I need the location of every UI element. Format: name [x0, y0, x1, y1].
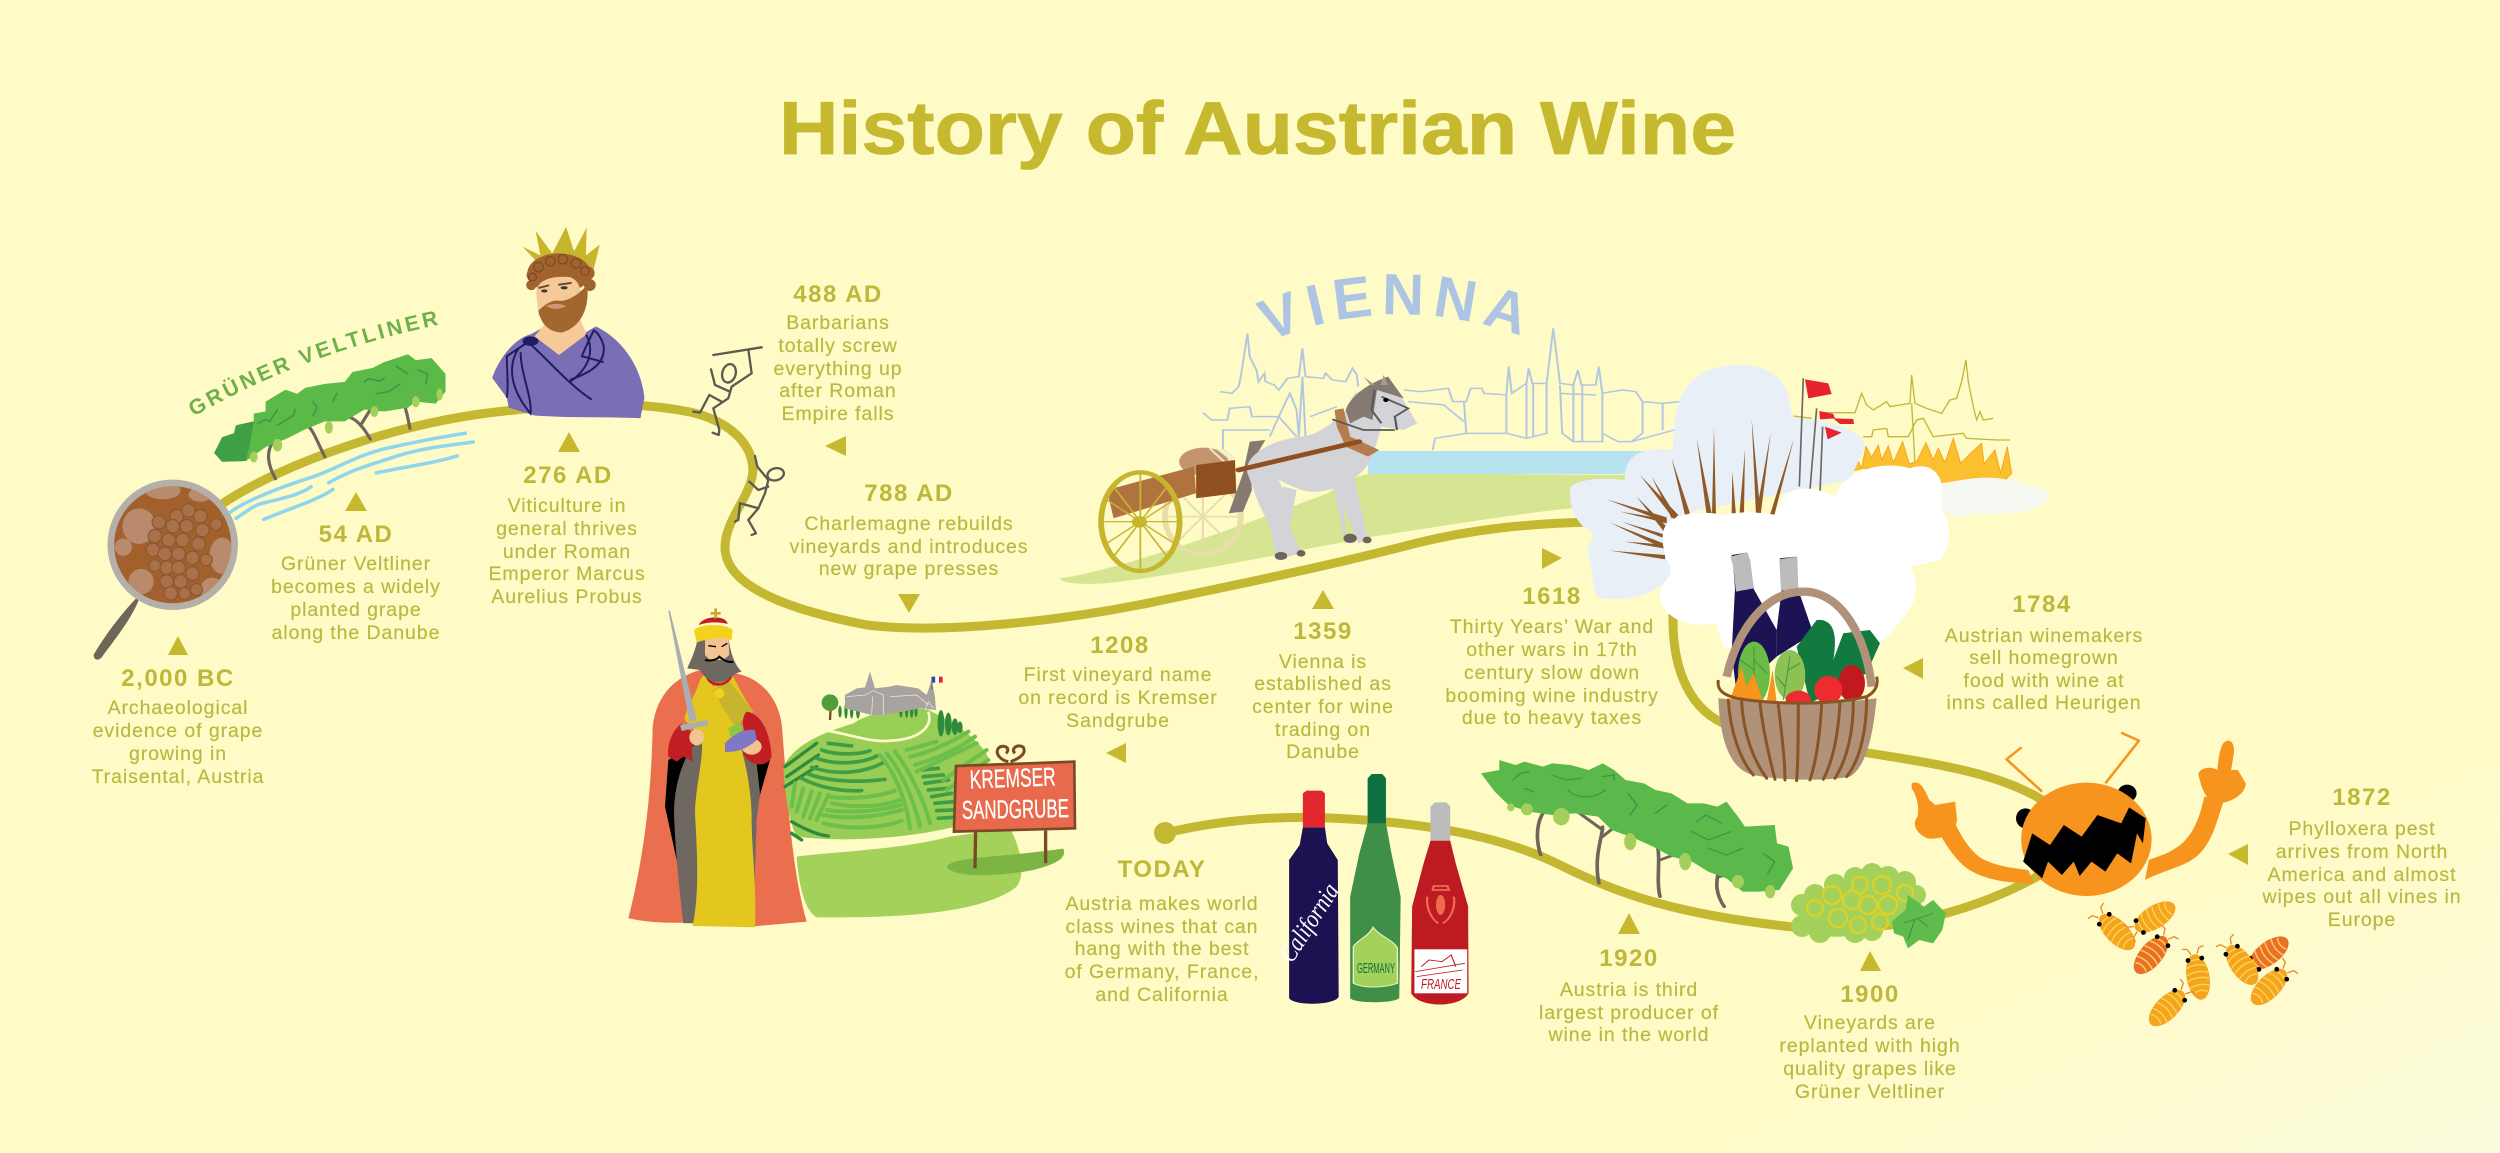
event: 1920: 1920 — [1599, 945, 1659, 972]
event: 1784: Austrian winemakers — [1945, 625, 2143, 647]
sign text: Kremser Sandgrube: KREMSER — [969, 761, 1056, 794]
event: 54 AD: becomes a widely — [271, 576, 441, 598]
event: 1900: 1900 — [1840, 981, 1900, 1008]
event: 788 AD: new grape presses — [819, 558, 999, 580]
sign text: Kremser Sandgrube: SANDGRUBE — [962, 793, 1069, 825]
event: 788 AD: 788 AD — [864, 480, 954, 507]
event: Today: class wines that can — [1066, 916, 1258, 938]
icon: grape leaf — [1892, 895, 1946, 948]
event: 1618: century slow down — [1464, 662, 1640, 684]
illustration: Danube river — [230, 433, 473, 519]
event: 788 AD: Charlemagne rebuilds — [804, 513, 1014, 535]
timeline start dot: today — [1154, 822, 1176, 844]
event: 1872: wipes out all vines in — [2261, 886, 2462, 908]
event: 1359: 1359 — [1293, 618, 1353, 645]
illustration: Charlemagne — [628, 608, 807, 927]
event: 1208: 1208 — [1090, 632, 1150, 659]
event: 1920: largest producer of — [1539, 1002, 1719, 1024]
word: VIENNA — [1255, 274, 1520, 336]
illustration: war smoke, spears, flags and burning city — [1570, 360, 2050, 658]
event: 1900: Grüner Veltliner — [1795, 1081, 1945, 1103]
event: 488 AD — [773, 281, 903, 456]
illustration: Vienna landscape and skyline — [1060, 328, 1680, 584]
event: 1872: Phylloxera pest — [2288, 818, 2436, 840]
event: 1872: arrives from North — [2276, 841, 2448, 863]
event: Today: TODAY — [1118, 856, 1206, 883]
event: 1900: quality grapes like — [1783, 1058, 1957, 1080]
illustration: Emperor Probus bust — [492, 227, 644, 418]
event: 54 AD: along the Danube — [272, 622, 440, 644]
event: 2,000 BC: 2,000 BC — [121, 665, 235, 692]
illustration: phylloxera bugs — [2088, 895, 2298, 1032]
event: 488 AD: everything up — [773, 358, 903, 380]
event: 488 AD: Barbarians — [786, 312, 890, 334]
event: 1900 — [1779, 951, 1961, 1103]
event: 1920: wine in the world — [1548, 1024, 1709, 1046]
illustration: 1920 vines — [1481, 760, 1793, 907]
title: History of Austrian Wine — [779, 86, 1736, 170]
illustration: Grüner Veltliner vines — [214, 354, 446, 479]
event: 1872: America and almost — [2268, 864, 2456, 886]
event: 276 AD: 276 AD — [523, 462, 613, 489]
event: 2,000 BC: Traisental, Austria — [92, 766, 264, 788]
event: 1618 — [1445, 548, 1659, 729]
event: 2,000 BC: Archaeological — [108, 697, 248, 719]
event: 54 AD: planted grape — [290, 599, 422, 621]
event: 788 AD: vineyards and introduces — [790, 536, 1028, 558]
illustration: horse and cart — [1101, 375, 1417, 572]
illustration: grape bunch and leaf — [1791, 861, 1946, 949]
event: 1900: replanted with high — [1779, 1035, 1961, 1057]
illustration: magnifying glass on soil — [94, 480, 238, 660]
event: 276 AD: Emperor Marcus — [488, 563, 646, 585]
event: 1900: Vineyards are — [1804, 1012, 1936, 1034]
event: 2,000 BC — [92, 636, 264, 788]
event: Today: of Germany, France, — [1065, 961, 1259, 983]
illustration: basket with wine and vegetables — [1718, 552, 1880, 781]
bottle label: Germany: GERMANY — [1357, 960, 1395, 977]
timeline road — [222, 404, 2050, 929]
event: 1872: 1872 — [2332, 784, 2392, 811]
event: 1208 — [1018, 632, 1218, 763]
event: 1359: trading on — [1275, 719, 1371, 741]
event: 1872 — [2228, 784, 2462, 931]
event: 1359: established as — [1254, 673, 1392, 695]
bottle label: France: FRANCE — [1421, 976, 1462, 993]
illustration: competing wine bottles — [1273, 774, 1469, 1005]
event: 1920: Austria is third — [1560, 979, 1698, 1001]
label: Grüner Veltliner: GRÜNER VELTLINER — [190, 312, 438, 414]
sign text: Kremser Sandgrube — [962, 761, 1069, 825]
event: 1920 — [1539, 913, 1719, 1046]
event: 1359: Danube — [1286, 741, 1360, 763]
event: 1359: Vienna is — [1279, 651, 1367, 673]
event: 1784: sell homegrown — [1969, 647, 2119, 669]
event: 1359 — [1252, 590, 1394, 763]
event: Today: and California — [1095, 984, 1229, 1006]
event: 1208: Sandgrube — [1066, 710, 1170, 732]
event: Today — [1065, 856, 1259, 1006]
event: 2,000 BC: evidence of grape — [93, 720, 263, 742]
event: 1872: Europe — [2328, 909, 2396, 931]
event: 276 AD: under Roman — [503, 541, 631, 563]
event: 1208: on record is Kremser — [1018, 687, 1218, 709]
event: 54 AD: 54 AD — [319, 521, 393, 548]
event: 1618: booming wine industry — [1445, 685, 1659, 707]
event: 276 AD — [488, 432, 646, 608]
event: 1618: Thirty Years’ War and — [1450, 616, 1654, 638]
event: 1359: center for wine — [1252, 696, 1394, 718]
event: 488 AD: after Roman — [779, 380, 897, 402]
event: 1784: inns called Heurigen — [1946, 692, 2142, 714]
event: 1784: 1784 — [2012, 591, 2072, 618]
event: Today: hang with the best — [1075, 938, 1249, 960]
illustration: barbarians climbing the road — [693, 347, 785, 535]
event: 1618: other wars in 17th — [1466, 639, 1638, 661]
event: Today: Austria makes world — [1065, 893, 1259, 915]
event: 54 AD — [271, 492, 441, 644]
event: 276 AD: general thrives — [496, 518, 638, 540]
event: 54 AD: Grüner Veltliner — [281, 553, 431, 575]
event: 788 AD — [790, 480, 1028, 613]
event: 488 AD: totally screw — [778, 335, 898, 357]
illustration: Kremser Sandgrube vineyard hill — [783, 672, 1075, 917]
event: 276 AD: Viticulture in — [508, 495, 626, 517]
event: 2,000 BC: growing in — [129, 743, 227, 765]
event: 1208: First vineyard name — [1024, 664, 1212, 686]
event: 1784: food with wine at — [1964, 670, 2124, 692]
event: 276 AD: Aurelius Probus — [491, 586, 643, 608]
bottle label: California: California — [1273, 878, 1345, 967]
event: 488 AD: 488 AD — [793, 281, 883, 308]
word: VIENNA: VIENNA — [1255, 274, 1520, 336]
event: 1784 — [1903, 591, 2143, 714]
event: 1618: due to heavy taxes — [1462, 707, 1642, 729]
illustration: phylloxera pest monster — [1912, 733, 2246, 896]
event: 488 AD: Empire falls — [782, 403, 894, 425]
event: 1618: 1618 — [1522, 583, 1582, 610]
